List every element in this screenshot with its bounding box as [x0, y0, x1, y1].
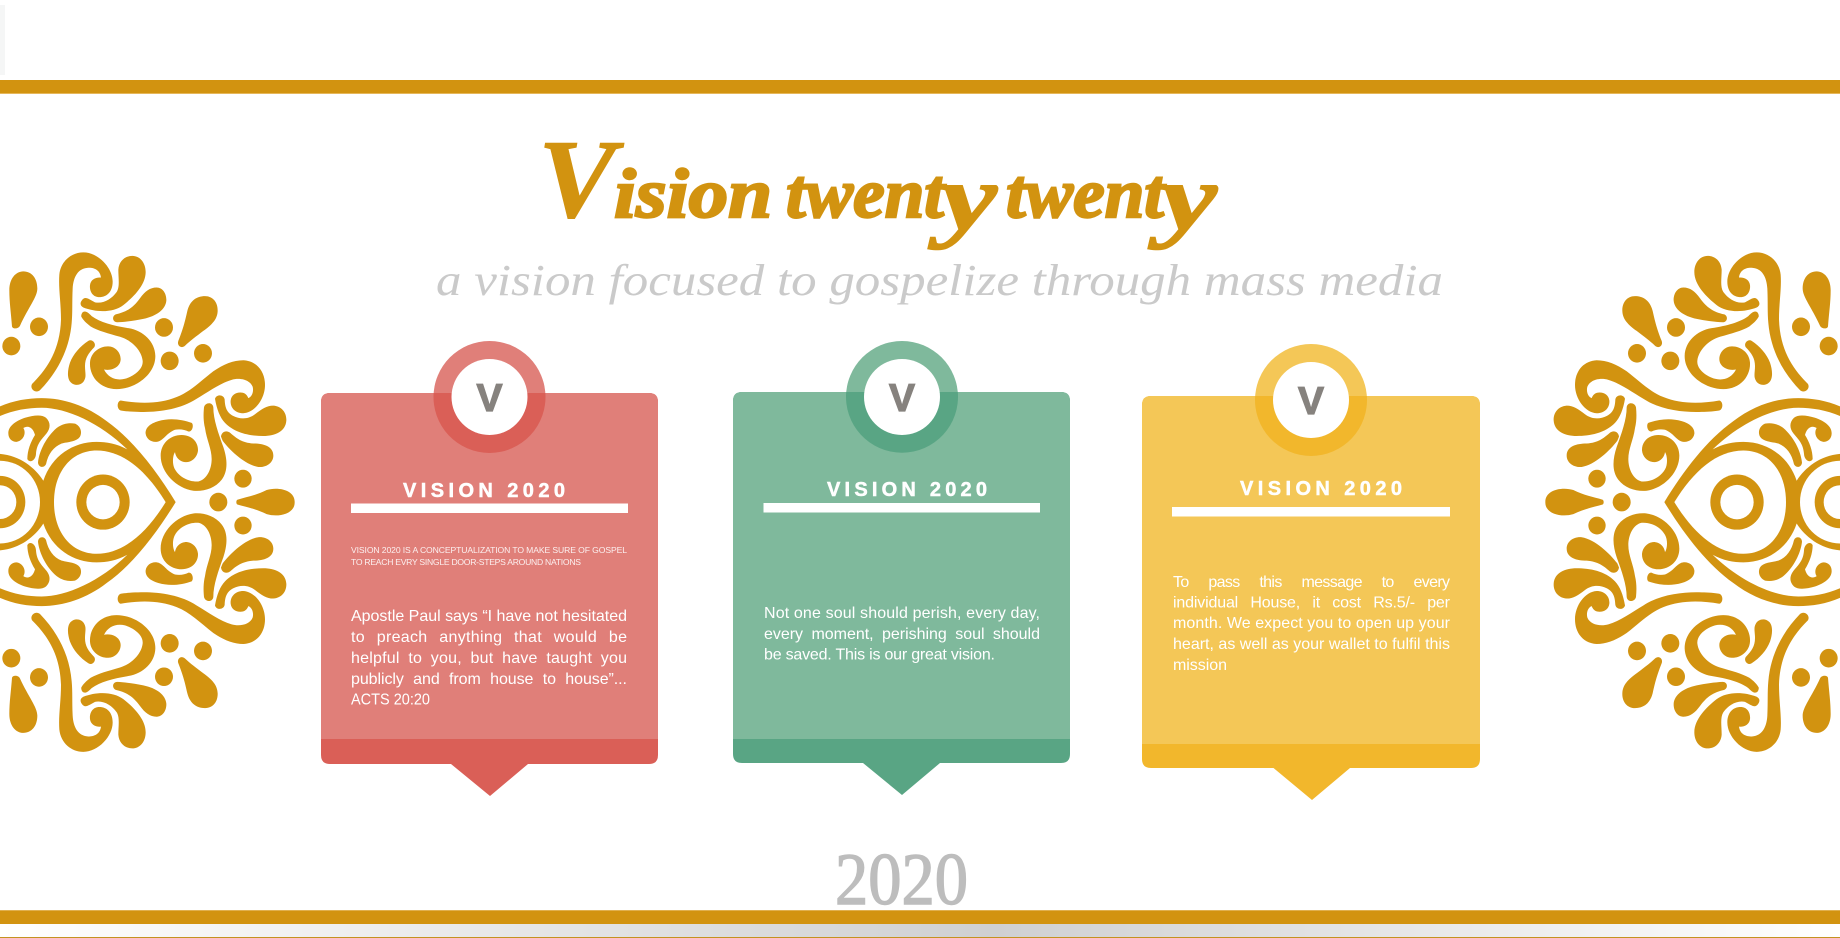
body text: individual House, it cost Rs.5/- per: [1173, 594, 1451, 612]
body text: be saved. This is our great vision.: [764, 646, 995, 664]
body text: Not one soul should perish, every day,: [764, 605, 1040, 622]
body text: publicly and from house to house”...: [351, 671, 627, 688]
subtitle: a vision focused to gospelize through mass media: [436, 256, 1443, 305]
body text: [351, 608, 627, 708]
body text: every moment, perishing soul should: [764, 626, 1040, 643]
year label: 2020: [835, 839, 968, 921]
body text: [764, 605, 1040, 664]
heading rule: [351, 504, 628, 513]
icon: V badge: [1255, 344, 1367, 456]
body text: Apostle Paul says “I have not hesitated: [351, 608, 627, 625]
heading: VISION 2020: [403, 480, 565, 502]
left mandala ornament: [0, 252, 295, 752]
heading rule: [764, 503, 1040, 512]
icon: V badge: [434, 341, 546, 453]
body text: To pass this message to every: [1173, 574, 1450, 591]
body text: ACTS 20:20: [351, 692, 430, 708]
body text: to preach anything that would be: [351, 629, 627, 646]
small caps intro: [351, 545, 627, 567]
body text: heart, as well as your wallet to fulfil this: [1173, 636, 1450, 653]
title: twent: [1006, 156, 1167, 233]
body text: mission: [1173, 657, 1227, 674]
title: y: [1148, 146, 1217, 250]
panel: red card: [321, 341, 658, 796]
right mandala ornament: [1545, 252, 1840, 752]
bottom gold bar: [0, 910, 1840, 938]
body text: [1173, 574, 1451, 674]
icon: V badge: [846, 341, 958, 453]
card body: [733, 392, 1070, 795]
small caps intro: TO REACH EVRY SINGLE DOOR-STEPS AROUND NATIONS: [351, 557, 581, 567]
icon: V badge: V: [889, 377, 915, 420]
top gold bar: [0, 80, 1840, 94]
faint corner strip: [0, 5, 5, 75]
small caps intro: VISION 2020 IS A CONCEPTUALIZATION TO MAKE SURE OF GOSPEL: [351, 545, 627, 555]
title: y: [928, 146, 997, 250]
panel: yellow card: [1142, 344, 1480, 800]
panel: green card: [733, 341, 1070, 795]
title: ision: [614, 156, 772, 233]
icon: V badge: V: [476, 377, 503, 420]
title: [538, 118, 1217, 250]
body text: helpful to you, but have taught you: [351, 650, 627, 667]
title: V: [538, 118, 625, 242]
body text: month. We expect you to open up your: [1173, 615, 1451, 632]
card body: [321, 393, 658, 796]
card body: [1142, 396, 1480, 800]
heading: VISION 2020: [827, 479, 987, 501]
heading: VISION 2020: [1240, 478, 1402, 500]
heading rule: [1172, 507, 1450, 516]
icon: V badge: V: [1298, 380, 1324, 423]
title: twent: [786, 156, 947, 233]
